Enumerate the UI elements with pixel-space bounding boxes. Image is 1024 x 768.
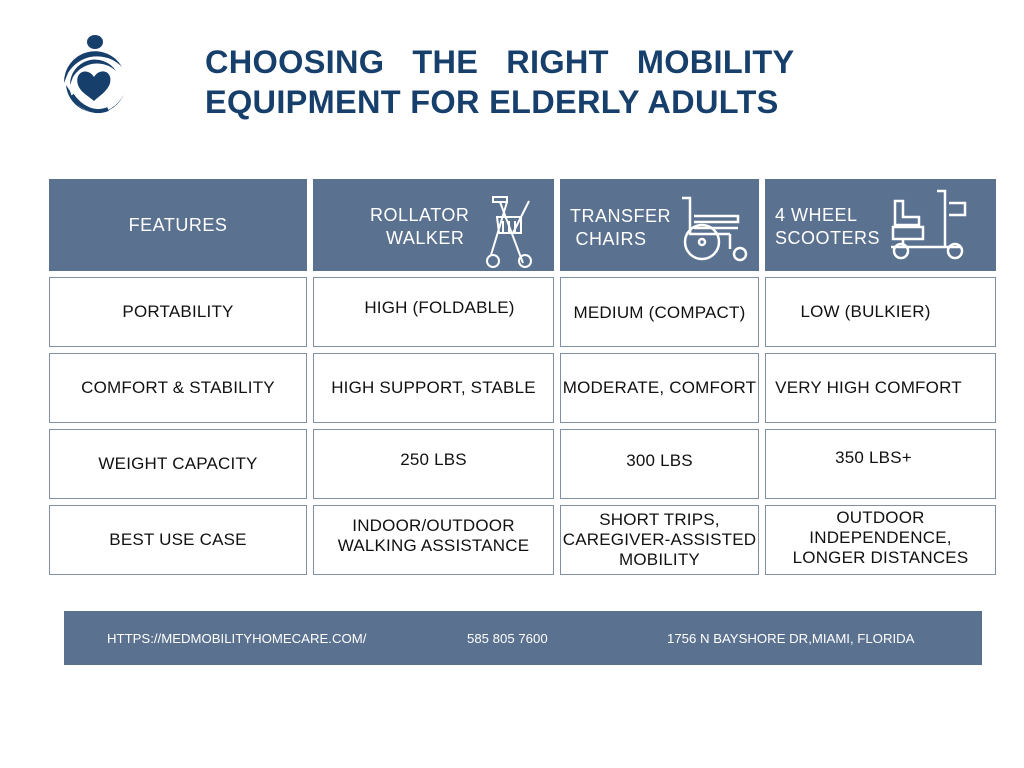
footer bbox=[64, 611, 982, 665]
text: CAREGIVER-ASSISTED bbox=[563, 530, 756, 549]
text: 350 LBS+ bbox=[835, 448, 912, 467]
header: features bbox=[49, 179, 307, 271]
text: MOBILITY bbox=[619, 550, 700, 569]
text: 250 LBS bbox=[400, 450, 467, 469]
header: features: FEATURES bbox=[129, 214, 227, 234]
text: SHORT TRIPS, bbox=[599, 510, 720, 529]
footer: 585 805 7600 bbox=[467, 631, 548, 646]
text: INDEPENDENCE, bbox=[809, 528, 952, 547]
header: scooters: 4 WHEEL bbox=[775, 205, 858, 225]
header: transfer chairs: TRANSFER bbox=[570, 206, 671, 226]
row: weight bbox=[49, 429, 307, 499]
title: EQUIPMENT FOR ELDERLY ADULTS bbox=[205, 84, 779, 120]
header: transfer chairs: CHAIRS bbox=[576, 229, 647, 249]
text: 300 LBS bbox=[626, 451, 693, 470]
icon: rollator bbox=[486, 196, 532, 268]
icon: scooter bbox=[891, 190, 966, 260]
row: portability: PORTABILITY bbox=[122, 302, 234, 321]
header: scooters bbox=[765, 179, 996, 271]
text: INDOOR/OUTDOOR bbox=[352, 516, 515, 535]
row: comfort bbox=[49, 353, 307, 423]
text: WALKING ASSISTANCE bbox=[338, 536, 529, 555]
footer: 1756 N BAYSHORE DR,MIAMI, FLORIDA bbox=[667, 631, 914, 646]
header: rollator walker: ROLLATOR bbox=[370, 205, 469, 225]
title: CHOOSING THE RIGHT MOBILITY bbox=[205, 44, 794, 80]
logo bbox=[64, 35, 124, 114]
text: LONGER DISTANCES bbox=[793, 548, 968, 567]
icon: wheelchair bbox=[682, 196, 748, 262]
text: VERY HIGH COMFORT bbox=[775, 378, 962, 397]
row: best use: BEST USE CASE bbox=[109, 530, 247, 549]
header: rollator walker: WALKER bbox=[386, 228, 464, 248]
footer: HTTPS://MEDMOBILITYHOMECARE.COM/ bbox=[107, 631, 366, 646]
row: portability bbox=[49, 277, 307, 347]
header: rollator walker bbox=[313, 179, 554, 271]
text: MEDIUM (COMPACT) bbox=[574, 303, 745, 322]
text: OUTDOOR bbox=[836, 508, 925, 527]
row: best use bbox=[49, 505, 307, 575]
text: HIGH (FOLDABLE) bbox=[364, 298, 515, 317]
text: LOW (BULKIER) bbox=[800, 302, 931, 321]
header: scooters: SCOOTERS bbox=[775, 228, 880, 248]
row: comfort: COMFORT & STABILITY bbox=[81, 378, 275, 397]
text: MODERATE, COMFORT bbox=[563, 378, 756, 397]
title bbox=[205, 44, 794, 120]
text: HIGH SUPPORT, STABLE bbox=[331, 378, 536, 397]
header: transfer chairs bbox=[560, 179, 759, 271]
row: weight: WEIGHT CAPACITY bbox=[98, 454, 258, 473]
